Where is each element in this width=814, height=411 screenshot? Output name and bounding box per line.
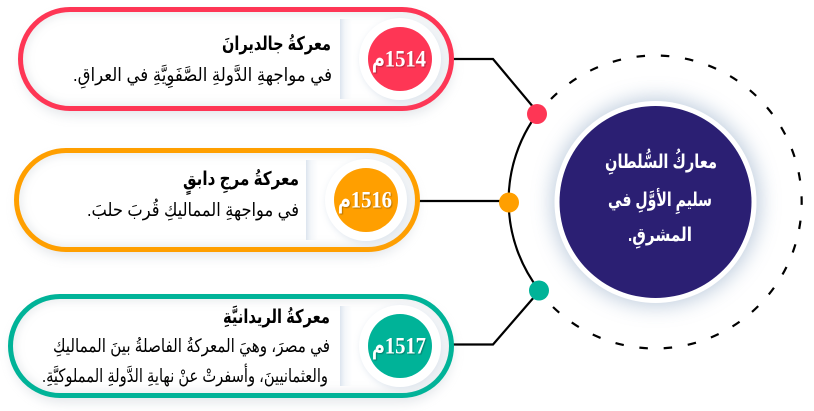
- year badge 1516: 1516م: [338, 188, 392, 214]
- year badge 1517: [368, 314, 432, 378]
- panel: battle of Chaldiran: [20, 10, 452, 115]
- text: Ridaniya description: [42, 335, 330, 387]
- year badge 1516: [334, 168, 398, 232]
- text: Ridaniya description: في مصرَ، وهيَ المعركةُ الفاصلةُ بينَ المماليكِ: [53, 335, 330, 357]
- central dashed ring and connector arc: [509, 56, 802, 349]
- central circle: title: سليمِ الأوَّلِ في: [608, 188, 712, 215]
- panel: battle of Marj Dabiq: [16, 150, 418, 256]
- connector dot: orange: [499, 192, 519, 212]
- panel: battle of Ridaniya: [10, 296, 452, 402]
- central circle: title: معاركُ السُّلطانِ: [605, 148, 717, 175]
- year badge 1514: 1514م: [372, 46, 426, 72]
- text: Marj Dabiq description: في مواجهةِ المماليكِ قُربَ حلبَ.: [87, 199, 299, 221]
- heading: Marj Dabiq: معركةُ مرجِ دابقٍ: [183, 169, 299, 196]
- year badge 1514: [368, 27, 432, 91]
- central circle: title: [552, 98, 760, 306]
- heading: Chaldiran: معركةُ جالديرانَ: [222, 34, 331, 55]
- connector dot: red: [527, 104, 547, 124]
- connector lines: [416, 59, 535, 344]
- central circle: title: المشرقِ.: [628, 225, 692, 249]
- text: Ridaniya description: والعثمانيينَ، وأسفرتْ عنْ نهايةِ الدَّولةِ المملوكيَّةِ.: [42, 363, 328, 387]
- text: Chaldiran description: في مواجهةِ الدَّولةِ الصَّفَوِيَّةِ في العراقِ.: [73, 64, 332, 89]
- connector dot: green: [529, 280, 549, 300]
- year badge 1517: 1517م: [372, 334, 426, 360]
- heading: Ridaniya: معركةُ الريدانيَّةِ: [223, 306, 330, 328]
